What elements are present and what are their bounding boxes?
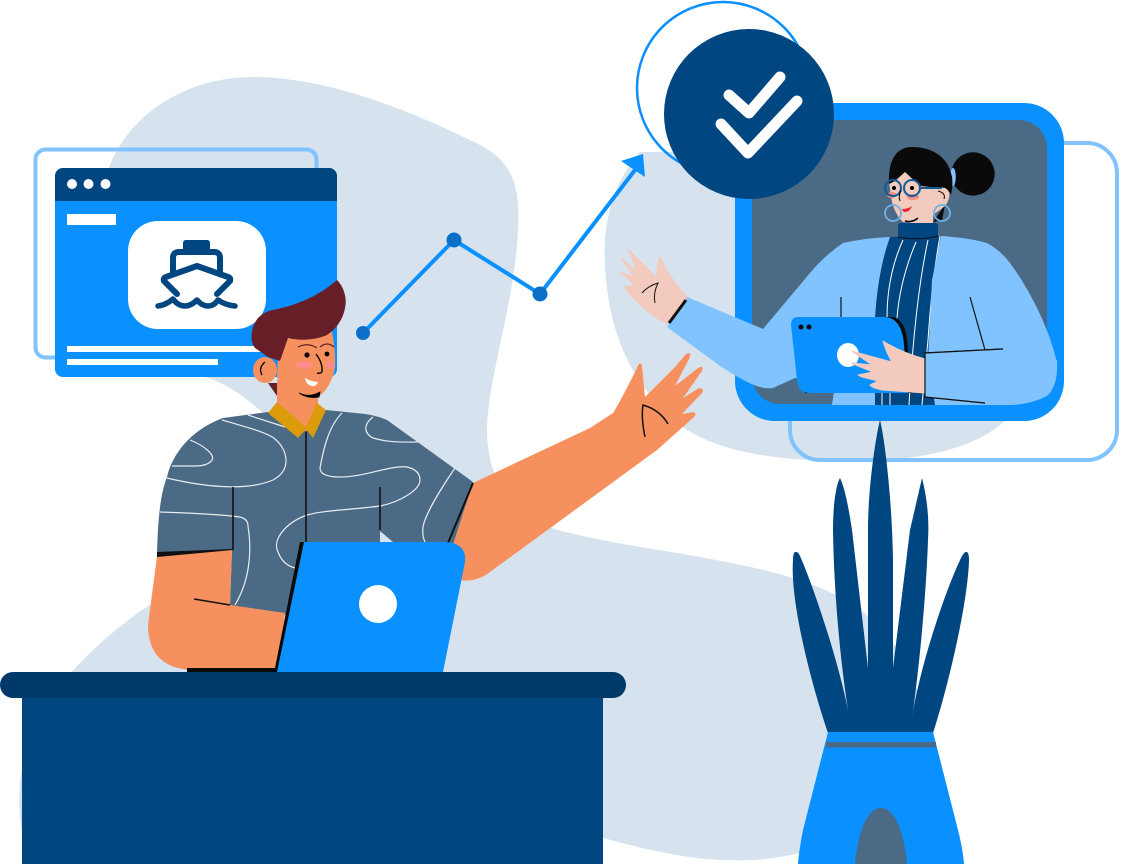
woman holding hand <box>852 341 925 393</box>
elbow crease <box>194 599 230 605</box>
collar line <box>898 236 938 239</box>
top stripes <box>882 236 940 405</box>
woman glasses <box>885 180 942 196</box>
woman turtleneck <box>898 223 938 238</box>
badge ring <box>637 2 809 174</box>
window text lines <box>67 346 267 365</box>
woman coat <box>667 236 1057 405</box>
check marks <box>721 77 797 153</box>
line chart arrow <box>356 154 645 340</box>
video frame back outline <box>790 143 1117 460</box>
wrist line <box>669 300 686 323</box>
chart markers <box>356 232 548 340</box>
icon tile <box>128 221 266 329</box>
desk body <box>22 698 603 864</box>
desk top <box>0 672 626 698</box>
man torso <box>157 410 473 615</box>
woman cheeks <box>887 192 919 200</box>
neck <box>277 380 318 432</box>
woman eyes, nose, mouth <box>892 186 944 222</box>
collar <box>268 402 326 438</box>
plant pot <box>798 732 964 864</box>
man right arm and hand <box>440 353 703 581</box>
plant leaves <box>793 420 969 733</box>
laptop <box>187 542 465 672</box>
plant <box>793 420 969 864</box>
woman <box>620 147 1057 405</box>
hair <box>252 280 346 361</box>
woman hair tie <box>950 168 956 186</box>
shirt contour lines <box>160 413 455 605</box>
window back outline <box>36 150 316 358</box>
window body <box>55 168 337 377</box>
sleeve edge <box>157 549 233 557</box>
facial features <box>261 344 334 398</box>
woman waving hand <box>620 249 687 324</box>
woman top <box>875 236 941 405</box>
pot arch <box>855 808 907 864</box>
ear <box>253 357 277 383</box>
window title bar <box>67 214 116 225</box>
video frame <box>735 103 1064 421</box>
torso gap <box>380 531 393 542</box>
background blob left <box>19 77 925 864</box>
front sleeve <box>925 349 1057 405</box>
man <box>148 280 703 672</box>
shirt seam lines <box>233 427 473 550</box>
sleeve outline <box>925 349 1003 403</box>
woman earrings <box>885 205 950 221</box>
hand crease <box>642 283 658 303</box>
desk <box>0 672 626 864</box>
hand crease <box>642 405 668 437</box>
window header <box>55 168 337 201</box>
arrow head <box>621 154 645 177</box>
window dots <box>67 179 110 189</box>
woman hair <box>889 147 952 195</box>
video frame inner <box>752 120 1047 404</box>
tablet <box>805 317 912 393</box>
laptop logo <box>359 585 397 623</box>
man left arm <box>148 550 285 670</box>
badge disc <box>664 29 834 199</box>
icon: ship <box>158 240 235 306</box>
back neck hair <box>268 383 277 396</box>
check badge <box>637 2 834 199</box>
background blob right <box>605 150 1010 461</box>
browser window <box>36 150 337 377</box>
tablet dots <box>798 324 812 330</box>
woman neck shadow hair <box>933 205 945 222</box>
woman hair bun <box>951 152 995 196</box>
coat lines <box>841 297 1003 403</box>
face <box>277 332 335 397</box>
woman face and neck <box>889 170 950 224</box>
tablet button <box>837 343 859 367</box>
pot rim <box>826 742 936 748</box>
